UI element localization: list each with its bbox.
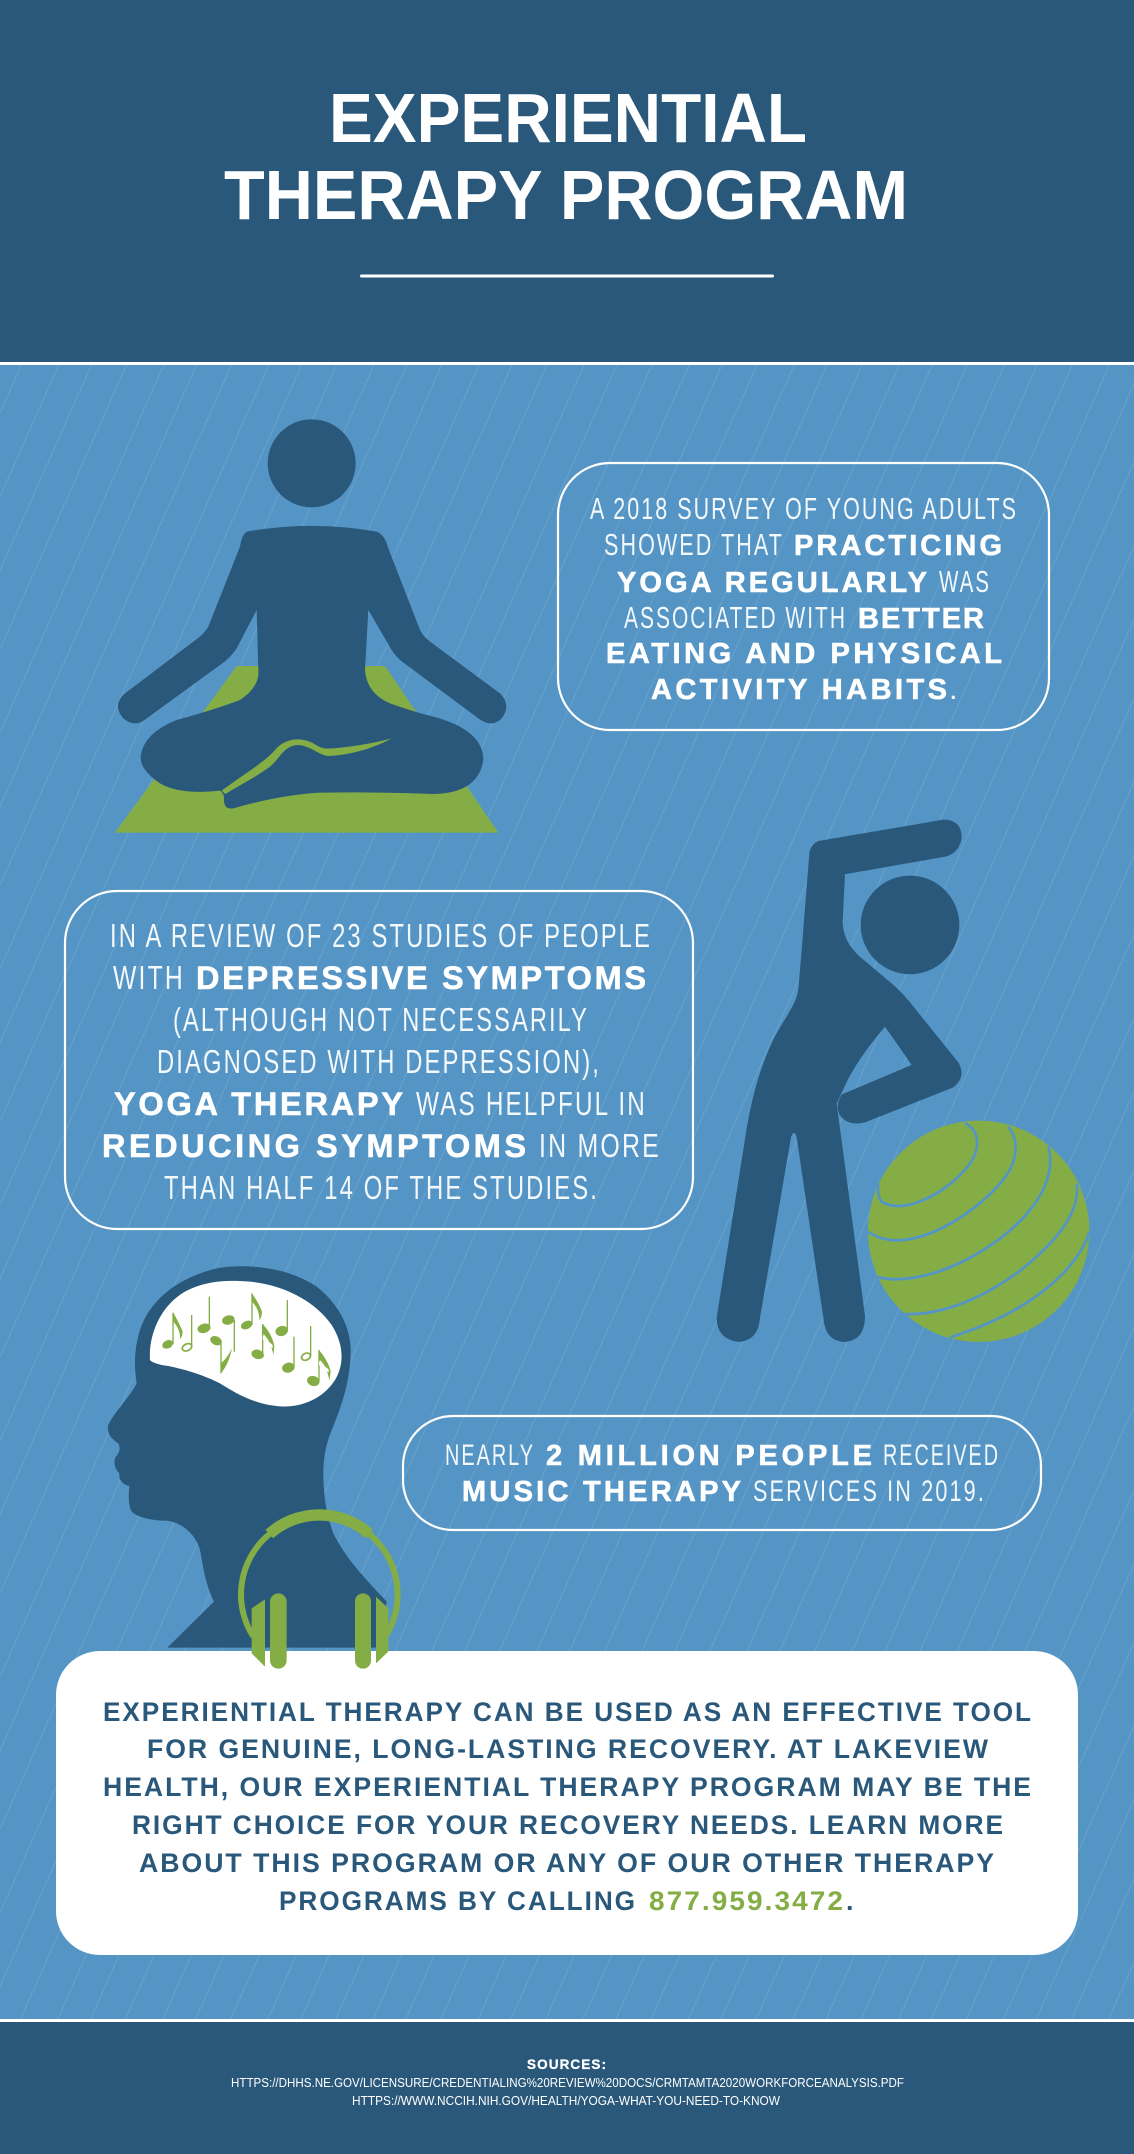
panel: closing statement: EXPERIENTIAL THERAPY CAN BE USED AS AN EFFECTIVE TOOL	[103, 1697, 1033, 1727]
callout: depressive symptoms review: DIAGNOSED WITH DEPRESSION),	[157, 1044, 601, 1081]
callout: music therapy: MUSIC THERAPY	[462, 1476, 741, 1508]
panel: closing statement: ABOUT THIS PROGRAM OR ANY OF OUR OTHER THERAPY	[139, 1848, 996, 1878]
icon: headphones	[241, 1515, 398, 1669]
callout: music therapy	[403, 1416, 1041, 1530]
title: EXPERIENTIAL	[329, 79, 807, 157]
callout: music therapy: NEARLY	[445, 1439, 535, 1472]
callout: yoga survey: .	[949, 671, 961, 706]
callout: yoga survey: YOGA REGULARLY	[617, 567, 927, 599]
callout: yoga survey: EATING AND PHYSICAL	[606, 638, 1002, 670]
callout: yoga survey: PRACTICING	[794, 530, 1002, 562]
footer band: sources	[0, 2019, 1134, 2154]
panel: closing statement: 877.959.3472	[649, 1886, 845, 1916]
panel: closing statement	[56, 1651, 1078, 1955]
panel: closing statement: .	[846, 1886, 856, 1916]
icon: head with music notes and headphones	[108, 1266, 398, 1669]
icon: music notes	[161, 1293, 331, 1387]
header band	[0, 0, 1134, 365]
callout: depressive symptoms review: (ALTHOUGH NOT NECESSARILY	[173, 1002, 589, 1039]
callout: yoga survey	[558, 463, 1049, 730]
striped blue background panel	[0, 364, 1134, 2020]
footer band: sources: SOURCES:	[527, 2057, 606, 2072]
callout: depressive symptoms review: REDUCING SYMPTOMS	[102, 1128, 526, 1164]
icon: meditating figure on yoga mat	[115, 419, 506, 833]
footer band: sources: HTTPS://DHHS.NE.GOV/LICENSURE/CREDENTIALING%20REVIEW%20DOCS/CRMTAMTA2020WORKFORCEANALYSIS.PDF	[231, 2076, 904, 2090]
callout: depressive symptoms review	[65, 891, 693, 1229]
footer band: sources: HTTPS://WWW.NCCIH.NIH.GOV/HEALTH/YOGA-WHAT-YOU-NEED-TO-KNOW	[352, 2094, 780, 2108]
panel: closing statement: RIGHT CHOICE FOR YOUR RECOVERY NEEDS. LEARN MORE	[132, 1810, 1005, 1840]
callout: yoga survey: SHOWED THAT	[604, 527, 784, 562]
callout: depressive symptoms review: THAN HALF 14 OF THE STUDIES.	[164, 1170, 599, 1207]
callout: music therapy: SERVICES IN 2019.	[753, 1475, 986, 1508]
title	[224, 79, 908, 234]
callout: yoga survey: BETTER	[858, 603, 984, 635]
callout: depressive symptoms review: WITH	[113, 960, 185, 997]
callout: music therapy: 2 MILLION PEOPLE	[546, 1440, 872, 1472]
callout: depressive symptoms review: YOGA THERAPY	[114, 1086, 403, 1122]
title: THERAPY PROGRAM	[224, 156, 908, 234]
panel: closing statement: HEALTH, OUR EXPERIENTIAL THERAPY PROGRAM MAY BE THE	[103, 1772, 1033, 1802]
callout: depressive symptoms review: WAS HELPFUL IN	[416, 1086, 647, 1123]
callout: depressive symptoms review: IN MORE	[539, 1128, 661, 1165]
callout: depressive symptoms review: DEPRESSIVE SYMPTOMS	[196, 960, 646, 996]
callout: music therapy: RECEIVED	[883, 1439, 1000, 1472]
panel: closing statement: FOR GENUINE, LONG-LASTING RECOVERY. AT LAKEVIEW	[147, 1734, 990, 1764]
callout: yoga survey: ACTIVITY HABITS	[651, 674, 947, 706]
panel: closing statement: PROGRAMS BY CALLING	[279, 1886, 637, 1916]
icon: stretching figure with exercise ball	[717, 820, 1089, 1342]
callout: depressive symptoms review: IN A REVIEW OF 23 STUDIES OF PEOPLE	[110, 918, 652, 955]
callout: yoga survey: WAS	[939, 564, 991, 599]
callout: yoga survey: ASSOCIATED WITH	[624, 600, 847, 635]
